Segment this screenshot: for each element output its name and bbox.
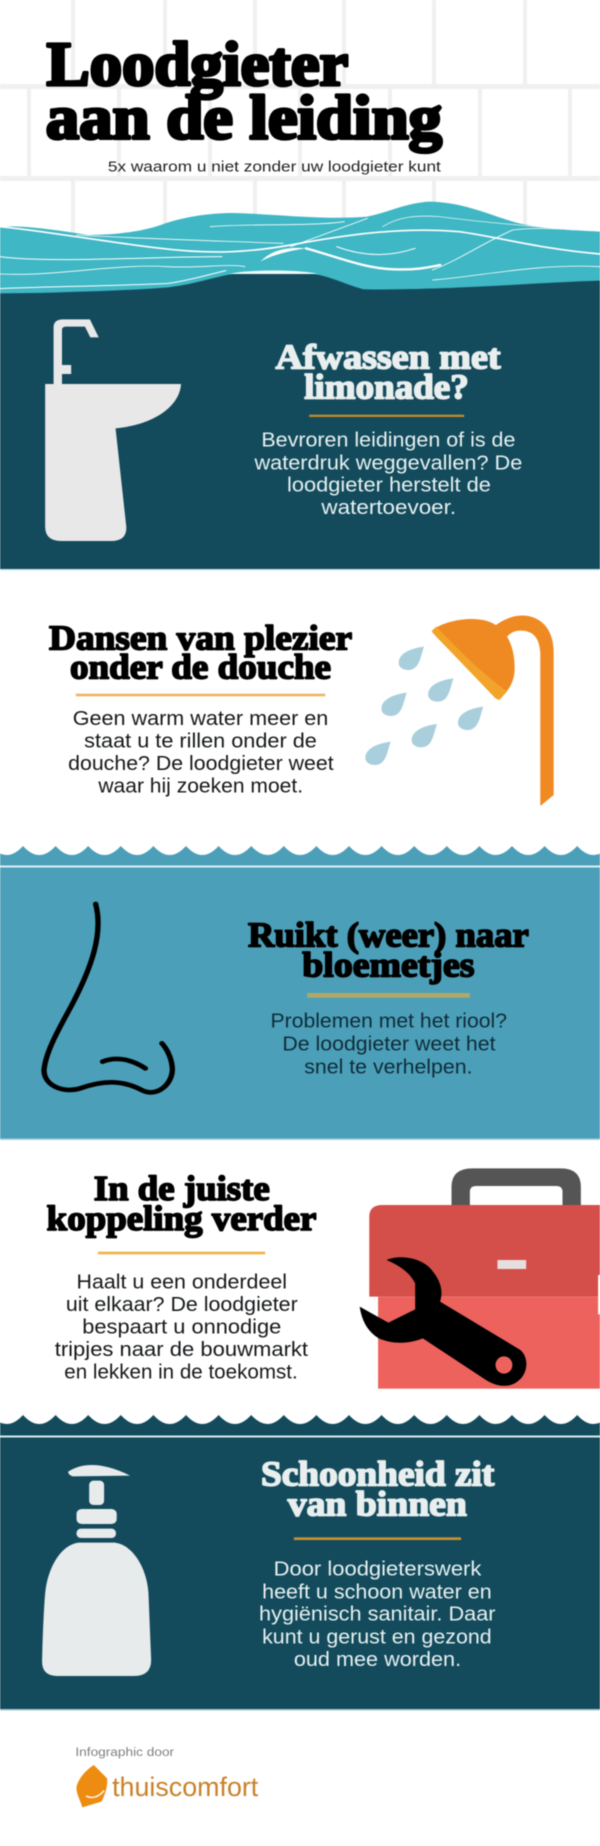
panel: blue section — [0, 846, 600, 1139]
title: Loodgieter — [47, 31, 348, 99]
text block: Schoonheid zit van binnen — [259, 1455, 496, 1671]
panel: dark soap section — [0, 1415, 600, 1709]
heading — [49, 619, 352, 687]
heading: Afwassen met — [276, 338, 501, 377]
body text: tripjes naar de bouwmarkt — [55, 1337, 309, 1361]
text block: Ruikt naar bloemetjes — [248, 916, 529, 1078]
background: tile wall — [0, 0, 600, 240]
body text: heeft u schoon water en — [262, 1580, 492, 1603]
body text — [259, 1557, 496, 1671]
body text: snel te verhelpen. — [304, 1055, 473, 1078]
footer: thuiscomfort logo: thuiscomfort — [112, 1773, 258, 1802]
icon: nose — [44, 904, 172, 1092]
heading: limonade? — [304, 368, 469, 407]
text block: In de juiste koppeling — [47, 1169, 317, 1383]
heading: bloemetjes — [302, 946, 474, 985]
heading: Schoonheid zit — [261, 1455, 495, 1494]
body text: Geen warm water meer en — [73, 706, 328, 730]
heading: onder de douche — [70, 648, 331, 687]
body text: bespaart u onnodige — [82, 1315, 281, 1338]
subtitle: 5x waarom u niet zonder uw loodgieter kunt — [108, 160, 441, 175]
body text: oud mee worden. — [294, 1647, 461, 1671]
body text — [271, 1009, 507, 1078]
panel: sink section background — [0, 285, 600, 569]
title: aan de leiding — [46, 84, 442, 152]
body text: staat u te rillen onder de — [84, 729, 317, 752]
footer: thuiscomfort logo — [76, 1765, 258, 1807]
body text: uit elkaar? De loodgieter — [66, 1292, 298, 1316]
icon: shower — [365, 616, 554, 806]
heading — [261, 1455, 495, 1524]
body text: Door loodgieterswerk — [274, 1557, 482, 1580]
body text: De loodgieter weet het — [282, 1032, 496, 1055]
icon: sink — [45, 319, 181, 541]
heading — [248, 916, 529, 985]
icon: toolbox with wrench — [360, 1168, 600, 1389]
body text: watertoevoer. — [320, 495, 456, 519]
body text: waar hij zoeken moet. — [97, 774, 303, 797]
body text — [55, 1270, 309, 1383]
body text: kunt u gerust en gezond — [262, 1625, 492, 1648]
body text: en lekken in de toekomst. — [64, 1360, 298, 1383]
body text: Problemen met het riool? — [271, 1009, 507, 1032]
body text — [68, 706, 334, 797]
text block: Afwassen met limonade — [253, 338, 522, 519]
body text: douche? De loodgieter weet — [68, 751, 334, 775]
water waves — [0, 202, 600, 300]
heading: koppeling verder — [47, 1199, 317, 1238]
heading — [47, 1169, 317, 1238]
body text: waterdruk weggevallen? De — [253, 451, 522, 474]
heading: In de juiste — [94, 1169, 270, 1208]
heading — [276, 338, 501, 407]
heading: Dansen van plezier — [49, 619, 352, 658]
text block: Dansen van plezier — [49, 619, 352, 797]
body text: Bevroren leidingen of is de — [261, 428, 515, 451]
body text — [253, 428, 522, 519]
body text: loodgieter herstelt de — [287, 473, 491, 496]
icon: soap dispenser — [42, 1465, 151, 1676]
body text: Haalt u een onderdeel — [77, 1270, 287, 1293]
panel edge — [0, 569, 600, 570]
body text: hygiënisch sanitair. Daar — [259, 1602, 496, 1625]
heading: van binnen — [288, 1485, 467, 1524]
heading: Ruikt (weer) naar — [248, 916, 529, 955]
footer: credit: Infographic door — [75, 1745, 175, 1759]
icon: water drops — [365, 647, 483, 765]
title — [46, 31, 442, 152]
